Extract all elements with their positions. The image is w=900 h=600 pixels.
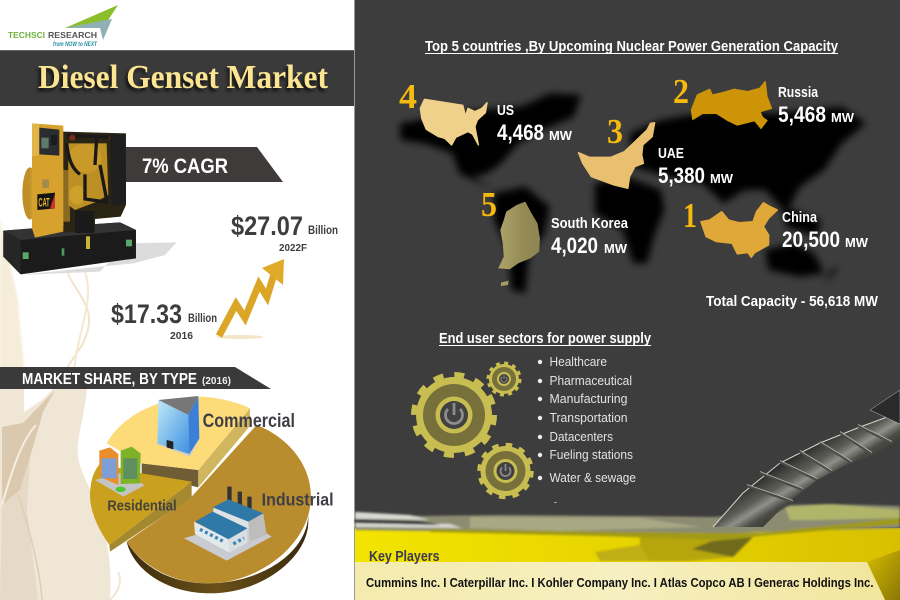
value: 2022 forecast: Billion: [308, 225, 338, 237]
list: end user sectors: Water & sewage: [550, 470, 636, 485]
country: UAE: 5,380: [658, 163, 705, 188]
title band: [0, 50, 354, 106]
country: UAE: UAE: [658, 146, 684, 162]
value: 2016: [111, 299, 217, 342]
country: UAE: [579, 112, 734, 188]
country: US: 4: [399, 77, 417, 116]
icon: gears: [414, 363, 532, 497]
industrial slice: [127, 425, 311, 593]
icon: factory: [184, 487, 272, 561]
panel: left white background: [0, 0, 355, 600]
country: China: 20,500: [782, 227, 840, 252]
value: 2016: $17.33: [111, 299, 182, 329]
label: industrial: Industrial: [262, 490, 334, 510]
country: South Korea: [481, 185, 629, 286]
country: South Korea: MW: [604, 241, 628, 256]
total capacity: Total Capacity - 56,618 MW: [706, 294, 878, 310]
country: US: 4,468: [497, 120, 544, 145]
country: South Korea: South Korea: [551, 216, 629, 232]
country: Russia: MW: [831, 110, 855, 125]
list: end user sectors: Healthcare: [550, 354, 607, 369]
value: 2022 forecast: $27.07: [231, 211, 303, 241]
country: South Korea: 5: [481, 185, 497, 224]
market share heading: MARKET SHARE, BY TYPE: [22, 371, 197, 388]
icon: diesel generator: [3, 123, 177, 275]
icon: fuel hose: [713, 390, 900, 527]
commercial slice: [107, 397, 250, 487]
list: end user sectors: Fueling stations: [550, 447, 633, 462]
panel: key players: [355, 548, 885, 600]
heading: end user sectors: End user sectors for power supply: [439, 331, 651, 347]
right edge line: [354, 0, 355, 600]
value: 2016: Billion: [188, 313, 217, 325]
country: US: US: [497, 103, 514, 119]
heading: top 5 countries: Top 5 countries ,By Upcoming Nuclear Power Generation Capacity: [425, 39, 838, 55]
country: UAE: 3: [607, 112, 623, 151]
country: US: MW: [549, 128, 573, 143]
country: Russia: 5,468: [778, 102, 826, 127]
country: Russia: [673, 72, 855, 128]
country: China: MW: [845, 235, 869, 250]
title: Diesel Genset Market: [38, 59, 329, 96]
value: 2016: 2016: [170, 330, 193, 342]
country: China: [683, 196, 869, 257]
value: 2022 forecast: 2022F: [279, 242, 308, 254]
beige liquid splash: [0, 217, 120, 600]
small gear: [488, 363, 520, 395]
panel: right dark background: [355, 0, 900, 600]
icon: diesel generator: CAT: [38, 195, 50, 209]
list: end user sectors: Pharmaceutical: [550, 373, 632, 388]
list: end user sectors: Datacenters: [550, 429, 613, 444]
blurred world map: [400, 93, 866, 293]
list: end user sectors: [538, 354, 636, 503]
list: end user sectors: Transportation: [550, 410, 628, 425]
country: Russia: Russia: [778, 85, 819, 101]
country: US: [399, 77, 573, 145]
country: China: 1: [683, 196, 697, 235]
medium gear: [480, 445, 532, 497]
list: end user sectors: Manufacturing: [550, 391, 628, 406]
label: residential: Residential: [107, 498, 177, 514]
logo: TechSci Research: from NOW to NEXT: [53, 42, 98, 48]
logo: TechSci Research: TECHSCI: [8, 30, 45, 40]
market share banner: (2016): [202, 376, 231, 387]
logo: TechSci Research: [8, 5, 118, 48]
logo: TechSci Research: RESEARCH: [48, 30, 97, 40]
growth arrow: [216, 259, 284, 339]
market share banner: [0, 367, 271, 389]
pie chart: market share: [90, 396, 334, 593]
icon: residential towers: [95, 447, 145, 497]
CAGR banner: [125, 147, 283, 182]
country: China: China: [782, 210, 818, 226]
key players heading: Key Players: [369, 548, 440, 565]
CAGR value: 7% CAGR: [142, 154, 228, 178]
value: 2022 forecast: [231, 211, 338, 254]
residential slice: [90, 463, 192, 552]
label: commercial: Commercial: [203, 410, 295, 432]
country: South Korea: 4,020: [551, 233, 598, 258]
icon: office building: [157, 396, 200, 457]
large gear: [414, 375, 494, 455]
oil surface: [355, 504, 900, 600]
country: Russia: 2: [673, 72, 689, 111]
country: UAE: MW: [710, 171, 734, 186]
